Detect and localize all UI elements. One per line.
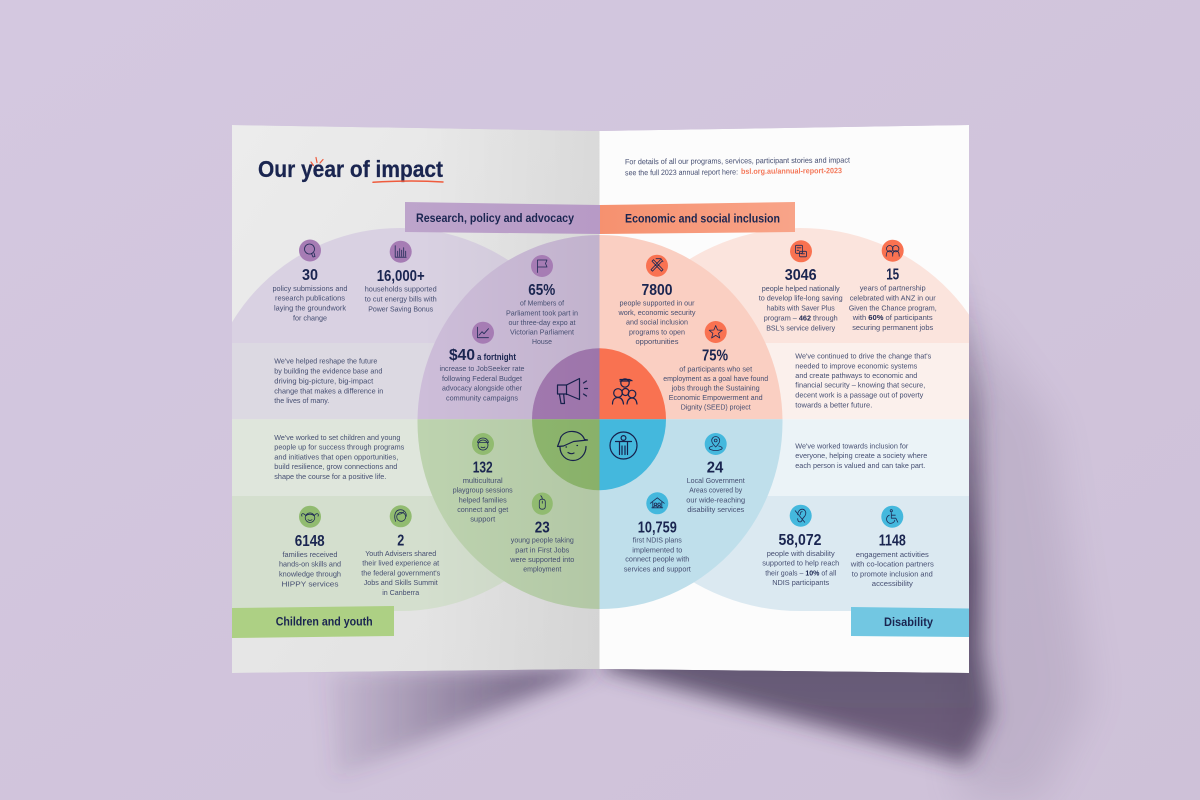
text block: research summary: by building the evidence base and [274, 367, 382, 376]
stat: 65% of Members of Parliament: of Members of [520, 299, 565, 308]
stat: 75% found employment: Economic Empowerment and [669, 393, 763, 402]
panel: economic text band [766, 343, 969, 419]
icon: wheelchair [881, 506, 903, 528]
icon: two people [882, 240, 904, 262]
stat: 58,072 people with disability [762, 505, 839, 587]
icon: young woman [390, 505, 412, 527]
icon: line chart [472, 322, 494, 344]
stat: $40 a fortnight: a fortnight [477, 352, 517, 363]
stat: 1148 engagement activities: engagement activities [856, 550, 929, 559]
stat: 15 years of partnership [849, 240, 937, 332]
stat: 15 years of partnership: 15 [886, 266, 899, 283]
stat: 3046 Saver Plus: to develop life-long saving [759, 294, 843, 303]
stat: 2 Youth Advisers: 2 [397, 532, 404, 549]
stat: 30 policy submissions [272, 240, 348, 322]
icon: girl with pigtails [299, 506, 321, 528]
stat: 10,759 NDIS plans: connect people with [625, 555, 689, 564]
brochure [205, 120, 1002, 680]
stat: 7800 people supported: and social inclusion [626, 317, 688, 326]
stat: 24 Local Government Areas: Areas covered by [689, 486, 742, 495]
stat: 132 playgroup sessions [453, 433, 513, 524]
icon: bar chart [390, 241, 412, 263]
heading: economic and social inclusion: Economic and social inclusion [625, 212, 780, 226]
brochure cast shadows [325, 255, 1090, 800]
panel: research outer arch [232, 228, 508, 343]
stat: 15 years of partnership: years of partnership [860, 284, 926, 293]
stat: 6148 families: hands-on skills and [279, 560, 341, 569]
text block: children summary: We've worked to set children and young [274, 433, 400, 442]
stat: 3046 Saver Plus: habits with Saver Plus [767, 304, 835, 313]
heading: disability [851, 607, 969, 637]
text block: research summary: change that makes a difference in [274, 386, 383, 395]
text block: children summary: people up for success through programs [274, 443, 404, 452]
icon: savings [790, 240, 812, 262]
text block: economic summary [795, 351, 931, 409]
icon: star [705, 321, 727, 343]
text block: children summary: build resilience, grow connections and [274, 462, 397, 471]
text block: research summary: We've helped reshape the future [274, 357, 377, 366]
stat: 16,000+ households: to cut energy bills with [365, 294, 437, 303]
stat: 7800 people supported: 7800 [642, 282, 672, 299]
stat: 16,000+ households: 16,000+ [377, 268, 425, 285]
stat: 23 First Jobs: were supported into [509, 555, 574, 564]
text block: disability summary [795, 441, 927, 470]
stat: 2 Youth Advisers: in Canberra [382, 588, 420, 597]
stat: 65% of Members of Parliament: Parliament took part in [506, 309, 578, 318]
stat: 75% found employment: Dignity (SEED) project [681, 403, 751, 412]
stat: 15 years of partnership: Given the Chance program, [849, 303, 937, 312]
stat: 6148 families [279, 506, 341, 588]
panel: economic outer arch [690, 228, 969, 343]
stat: 15 years of partnership: celebrated with ANZ in our [850, 293, 936, 302]
stat: $40 a fortnight: advocacy alongside other [442, 384, 522, 393]
stat: 23 First Jobs: young people taking [511, 536, 574, 545]
stat: 1148 engagement activities [850, 506, 934, 588]
stat: 75% found employment: 75% [702, 348, 728, 365]
text block: disability summary: We've worked towards inclusion for [795, 441, 909, 450]
stat: 132 playgroup sessions: helped families [459, 495, 507, 504]
text block: economic summary: financial security – knowing that secure, [795, 381, 925, 390]
icon: search head [299, 240, 321, 262]
stat: 2 Youth Advisers: Youth Advisers shared [365, 549, 436, 558]
left page [232, 125, 600, 673]
stat: 58,072 people with disability: their goals – 10% of all [765, 568, 836, 577]
stat: 58,072 people with disability: supported to help reach [762, 559, 839, 568]
stat: 10,759 NDIS plans: 10,759 [638, 519, 677, 536]
stat: 30 policy submissions: 30 [302, 267, 318, 284]
stat: 10,759 NDIS plans: services and support [624, 564, 692, 573]
text block: disability summary: each person is valued and can take part. [795, 461, 925, 470]
stat: 7800 people supported: people supported in our [620, 298, 695, 307]
text block: research summary: the lives of many. [274, 396, 329, 405]
panel: children text band [232, 420, 432, 496]
text block: economic summary: We've continued to drive the change that's [795, 351, 931, 360]
stat: 65% of Members of Parliament: 65% [528, 282, 555, 299]
icon: house with people [646, 492, 668, 514]
annual report note: bsl.org.au/annual-report-2023 [741, 166, 842, 176]
stat: 75% found employment: employment as a goal have found [663, 374, 768, 383]
right page [600, 125, 969, 673]
underline accent [373, 181, 443, 182]
stat: 24 Local Government Areas: 24 [707, 459, 724, 476]
heading: economic and social inclusion [600, 202, 795, 234]
stat: 30 policy submissions: for change [293, 313, 327, 322]
panel: disability lower area [694, 496, 969, 611]
stat: 65% of Members of Parliament: Victorian Parliament [510, 327, 575, 336]
heading: children and youth: Children and youth [276, 615, 373, 629]
icon: crossed ear [790, 505, 812, 527]
stat: $40 a fortnight [440, 322, 524, 403]
stat: 58,072 people with disability: 58,072 [778, 532, 822, 549]
stat: 3046 Saver Plus: program – 462 through [764, 314, 838, 323]
stat: 6148 families: 6148 [295, 533, 325, 550]
stat: 132 playgroup sessions: multicultural [463, 476, 503, 485]
stat: 3046 Saver Plus: 3046 [785, 267, 817, 284]
icon: megaphone [558, 378, 588, 404]
icon: child with cap [558, 431, 588, 460]
heading: children and youth [232, 606, 394, 638]
icon: phone [532, 492, 553, 515]
heading: research, policy and advocacy: Research, policy and advocacy [416, 211, 574, 225]
stat: 30 policy submissions: policy submissions and [272, 284, 348, 293]
stat: 16,000+ households: Power Saving Bonus [368, 304, 433, 313]
text block: children summary [274, 433, 404, 481]
stat: 1148 engagement activities: 1148 [879, 533, 906, 550]
stat: 30 policy submissions: laying the groundwork [274, 304, 346, 313]
annual report note: For details of all our programs, services, participant stories and impact [625, 156, 851, 166]
stat: 132 playgroup sessions: playgroup sessions [453, 486, 513, 495]
stat: 75% found employment: jobs through the Sustaining [671, 383, 760, 392]
stat: 10,759 NDIS plans: implemented to [632, 545, 682, 554]
stat: 65% of Members of Parliament [506, 255, 578, 346]
stat: $40 a fortnight: community campaigns [446, 394, 518, 403]
stat: 7800 people supported [618, 255, 696, 346]
text block: research summary: driving big-picture, big-impact [274, 377, 374, 386]
text block: children summary: and initiatives that open opportunities, [274, 452, 398, 461]
panel: research text band [232, 343, 434, 419]
stat: 10,759 NDIS plans: first NDIS plans [633, 536, 682, 545]
stat: 10,759 NDIS plans [624, 492, 692, 573]
stat: 30 policy submissions: research publications [275, 294, 345, 303]
stat: 3046 Saver Plus [759, 240, 843, 332]
stat: 58,072 people with disability: NDIS participants [772, 578, 829, 587]
heading: research, policy and advocacy [405, 202, 600, 234]
stat: 23 First Jobs: part in First Jobs [515, 545, 569, 554]
stat: 23 First Jobs [509, 492, 574, 574]
stat: 23 First Jobs: employment [523, 565, 562, 574]
icon: group of people [612, 379, 637, 404]
stat: 65% of Members of Parliament: House [532, 337, 552, 346]
stat: 6148 families: HIPPY services [282, 579, 339, 588]
stat: 6148 families: knowledge through [279, 569, 341, 578]
annual report note [625, 156, 851, 177]
centre circle [532, 348, 666, 490]
stat: 7800 people supported: programs to open [629, 327, 685, 336]
stat: 6148 families: families received [282, 550, 338, 559]
stat: 2 Youth Advisers: Jobs and Skills Summit [364, 578, 439, 587]
stat: 15 years of partnership: securing permanent jobs [852, 323, 933, 332]
panel: disability text band [768, 420, 969, 496]
text block: research summary [274, 357, 383, 405]
stat: 24 Local Government Areas [686, 433, 745, 514]
stat: 16,000+ households: households supported [365, 285, 437, 294]
stat: 2 Youth Advisers: their lived experience at [362, 559, 440, 568]
stat: 132 playgroup sessions: support [470, 515, 496, 524]
fold shading [540, 130, 600, 670]
stat: 132 playgroup sessions: connect and get [457, 505, 509, 514]
heading: disability: Disability [884, 615, 933, 629]
spark accent [311, 158, 323, 166]
text block: disability summary: everyone, helping create a society where [795, 451, 927, 460]
text block: economic summary: towards a better future. [795, 400, 872, 409]
stat: 75% found employment: of participants who set [679, 364, 753, 373]
stat: $40 a fortnight: $40 [449, 347, 475, 364]
text block: children summary: shape the course for a positive life. [274, 472, 386, 481]
stat: 2 Youth Advisers: the federal government's [361, 569, 440, 578]
panel: children lower area [232, 496, 504, 611]
stat: 75% found employment [663, 321, 768, 412]
stat: 7800 people supported: opportunities [636, 337, 679, 346]
middle circle [418, 235, 782, 609]
icon: crossed tools [646, 255, 668, 277]
text block: economic summary: needed to improve economic systems [795, 361, 917, 370]
icon: flag [531, 255, 553, 277]
stat: 15 years of partnership: with 60% of participants [852, 313, 933, 322]
text block: economic summary: and create pathways to economic and [795, 371, 917, 380]
stat: 132 playgroup sessions: 132 [473, 460, 493, 477]
stat: 65% of Members of Parliament: our three-day expo at [508, 318, 576, 327]
stat: 24 Local Government Areas: Local Government [687, 476, 745, 485]
stat: 24 Local Government Areas: our wide-reaching [686, 495, 745, 504]
stat: 3046 Saver Plus: BSL's service delivery [766, 323, 835, 332]
stat: 2 Youth Advisers [361, 505, 440, 597]
text block: economic summary: decent work is a passage out of poverty [795, 390, 923, 399]
stat: 3046 Saver Plus: people helped nationally [762, 284, 840, 293]
icon: map pin [705, 433, 727, 455]
stat: 1148 engagement activities: with co-location partners [850, 560, 934, 569]
annual report note: see the full 2023 annual report here: [625, 167, 738, 177]
stat: 58,072 people with disability: people with disability [767, 549, 835, 558]
icon: child face [472, 433, 494, 455]
stat: 24 Local Government Areas: disability services [687, 505, 744, 514]
stat: $40 a fortnight: following Federal Budget [442, 374, 523, 383]
stat: 16,000+ households [365, 241, 437, 313]
stat: $40 a fortnight: increase to JobSeeker rate [440, 364, 524, 373]
icon: accessibility figure [610, 432, 637, 459]
stat: 23 First Jobs: 23 [535, 520, 550, 537]
stat: 1148 engagement activities: accessibility [872, 579, 913, 588]
stat: 7800 people supported: work, economic security [618, 308, 696, 317]
stat: 1148 engagement activities: to promote inclusion and [852, 569, 933, 578]
title: Our year of impact [258, 156, 443, 182]
